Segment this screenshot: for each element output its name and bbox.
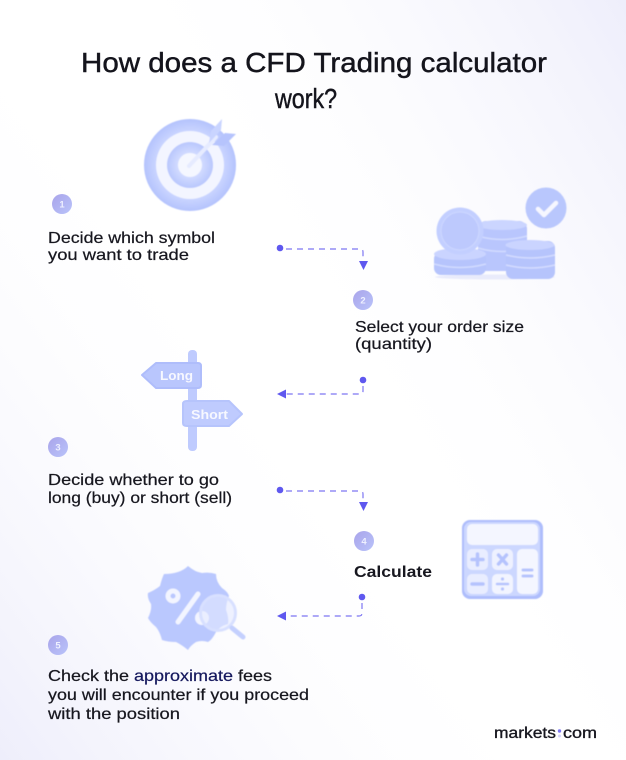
step 4 badge <box>354 531 374 551</box>
icon: target with arrow <box>144 119 236 211</box>
step 1 text: you want to trade <box>48 247 189 264</box>
step 2 badge: 2 <box>360 296 366 306</box>
icon: calculator <box>462 520 543 599</box>
arrow: step 4 to step 5 <box>277 594 365 620</box>
arrow: step 2 to step 3 <box>277 377 366 398</box>
step 5 text <box>47 668 309 723</box>
title: work? <box>274 83 337 114</box>
step 1 text <box>48 230 215 264</box>
title <box>81 47 547 114</box>
logo: markets.com: com <box>563 725 597 742</box>
arrow: step 3 to step 4 <box>277 487 368 511</box>
step 3 text: long (buy) or short (sell) <box>48 490 232 507</box>
step 3 text: Decide whether to go <box>48 472 219 489</box>
step 1 badge <box>52 194 72 214</box>
step 2 badge <box>353 290 373 310</box>
logo: markets.com <box>494 725 597 742</box>
step 5 text: you will encounter if you proceed <box>48 687 309 704</box>
step 2 text: (quantity) <box>355 336 432 353</box>
step 5 badge: 5 <box>55 640 61 652</box>
step 3 text <box>48 472 232 507</box>
icon: coin stacks with check badge <box>434 188 566 280</box>
title: How does a CFD Trading calculator <box>81 47 547 78</box>
arrow: step 1 to step 2 <box>277 245 368 270</box>
icon: long and short signpost: Long <box>160 368 193 383</box>
step 1 badge: 1 <box>59 200 65 210</box>
icon: long and short signpost <box>142 350 242 451</box>
step 5 badge <box>48 635 68 655</box>
step 5 text: Check the approximate fees <box>48 668 272 685</box>
icon: long and short signpost: Short <box>191 407 229 422</box>
step 4 text: Calculate <box>354 564 432 581</box>
step 5 text: with the position <box>47 706 180 723</box>
step 3 badge: 3 <box>55 442 61 454</box>
step 3 badge <box>48 437 68 457</box>
step 4 badge: 4 <box>361 536 367 548</box>
icon: percent badge with magnifier <box>148 566 243 650</box>
logo: markets.com: markets <box>494 725 556 742</box>
step 1 text: Decide which symbol <box>48 230 215 247</box>
step 2 text: Select your order size <box>355 319 524 336</box>
step 2 text <box>355 319 524 353</box>
